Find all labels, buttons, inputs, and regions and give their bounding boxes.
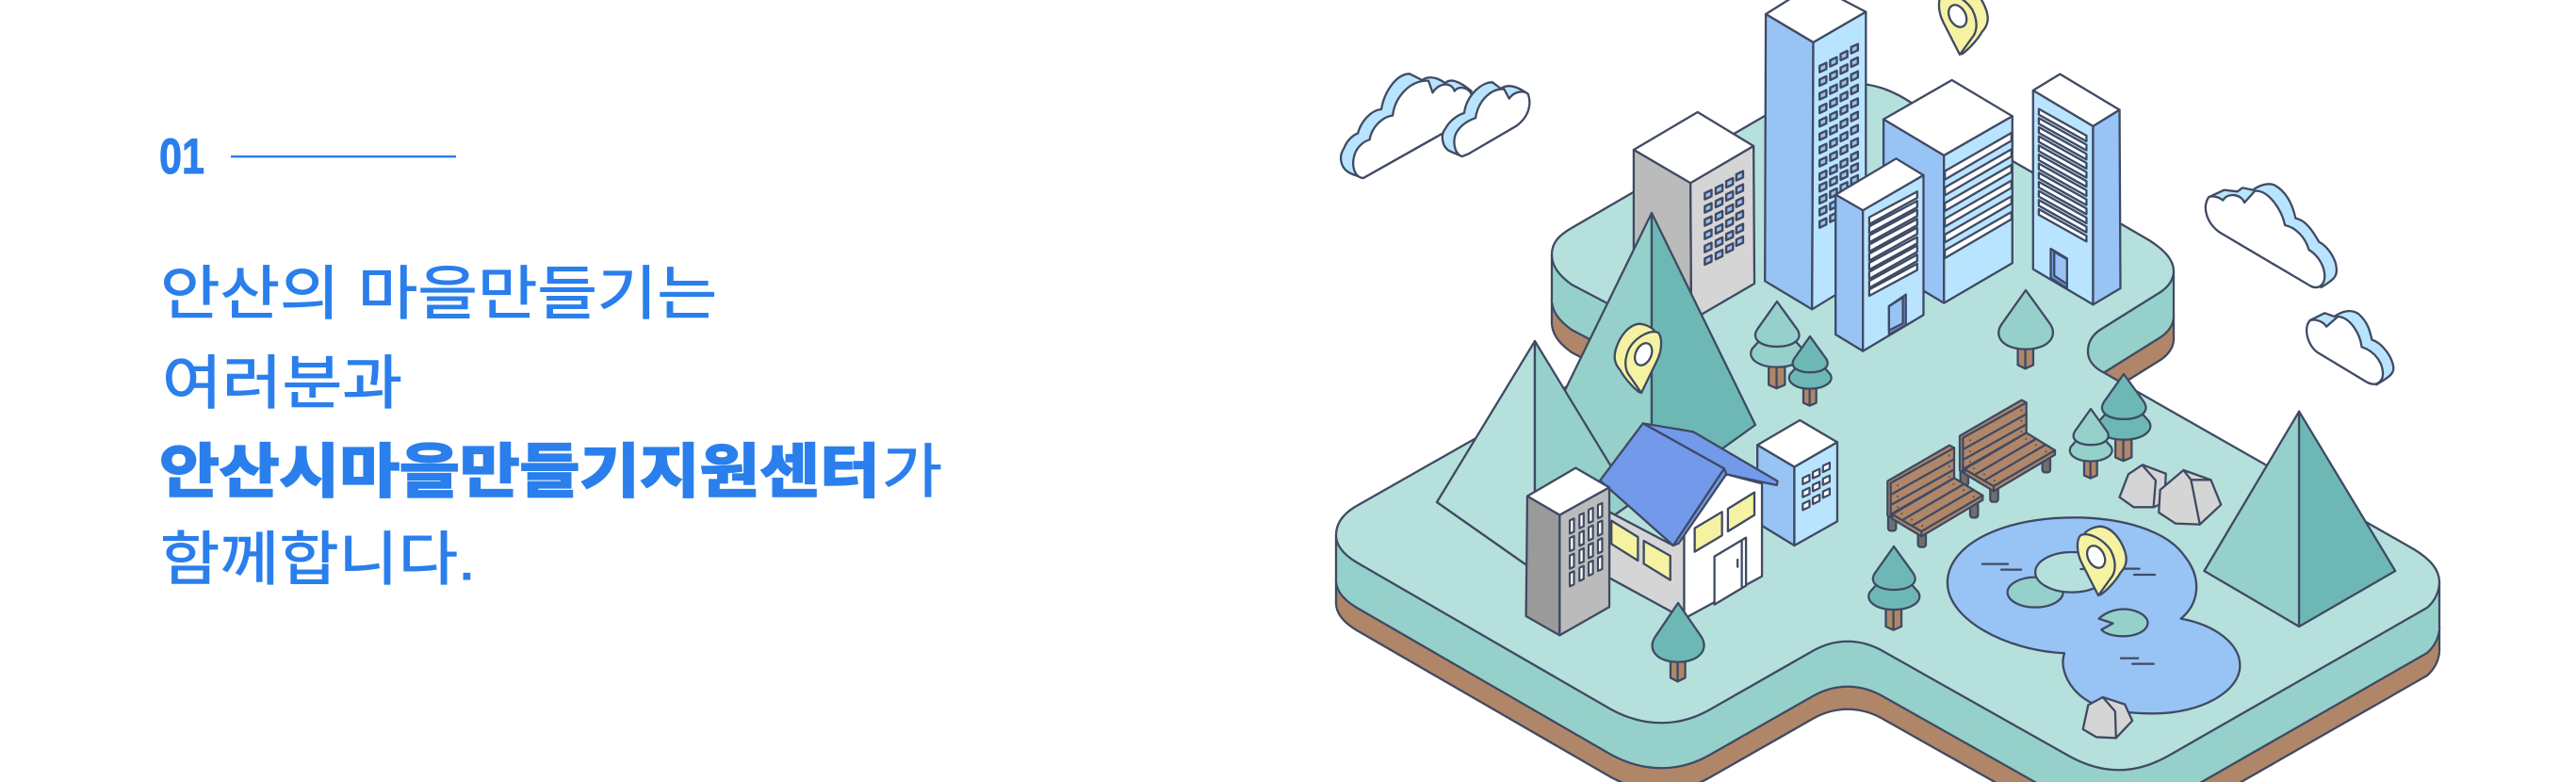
front small blue building [1835,158,1923,351]
clouds right [2206,184,2393,384]
heading text block: 함께합니다. [160,528,476,593]
benches [1887,400,2055,547]
heading text block: 가 [882,440,942,505]
section number 01: 01 [159,129,204,185]
house [1600,423,1778,619]
map pin on mountain [1615,324,1661,393]
door [1715,538,1746,605]
rocks [2120,464,2221,525]
heading text block: 안산시마을만들기지원센터 [159,440,880,505]
tree pair upper [1751,301,1832,406]
map pin top [1939,0,1988,55]
tree near pond [1868,546,1919,630]
gray tower [1526,468,1609,635]
tree front [1653,603,1704,681]
pond [1948,517,2240,713]
green mid layer [1334,254,2440,782]
divider line [231,155,456,157]
roof [1600,423,1778,546]
brown soil layer [1334,300,2440,782]
platform: layered island base [1336,83,2439,782]
heading text block: 여러분과 [162,351,402,416]
ripples [1982,564,2155,664]
trees upper right of benches [2070,374,2150,479]
left mountain [1437,341,1633,571]
heading text block: 안산의 마을만들기는 [160,262,717,327]
right mountain [2204,412,2395,627]
tall blue tower [1765,0,1866,309]
big mountain [1548,213,1755,499]
house windows [1611,493,1754,580]
lily pads [2008,578,2063,608]
right slim blue tower [2033,74,2120,304]
clouds behind left [1341,73,1529,178]
map pin on pond [2078,527,2127,595]
rock at pond edge [2083,697,2132,738]
gray back building [1634,112,1754,320]
heading text block [159,262,942,593]
small blue block behind house [1757,420,1837,546]
ground surface [1336,83,2439,770]
tree upper right [1998,290,2053,368]
wide blue building [1883,80,2013,303]
